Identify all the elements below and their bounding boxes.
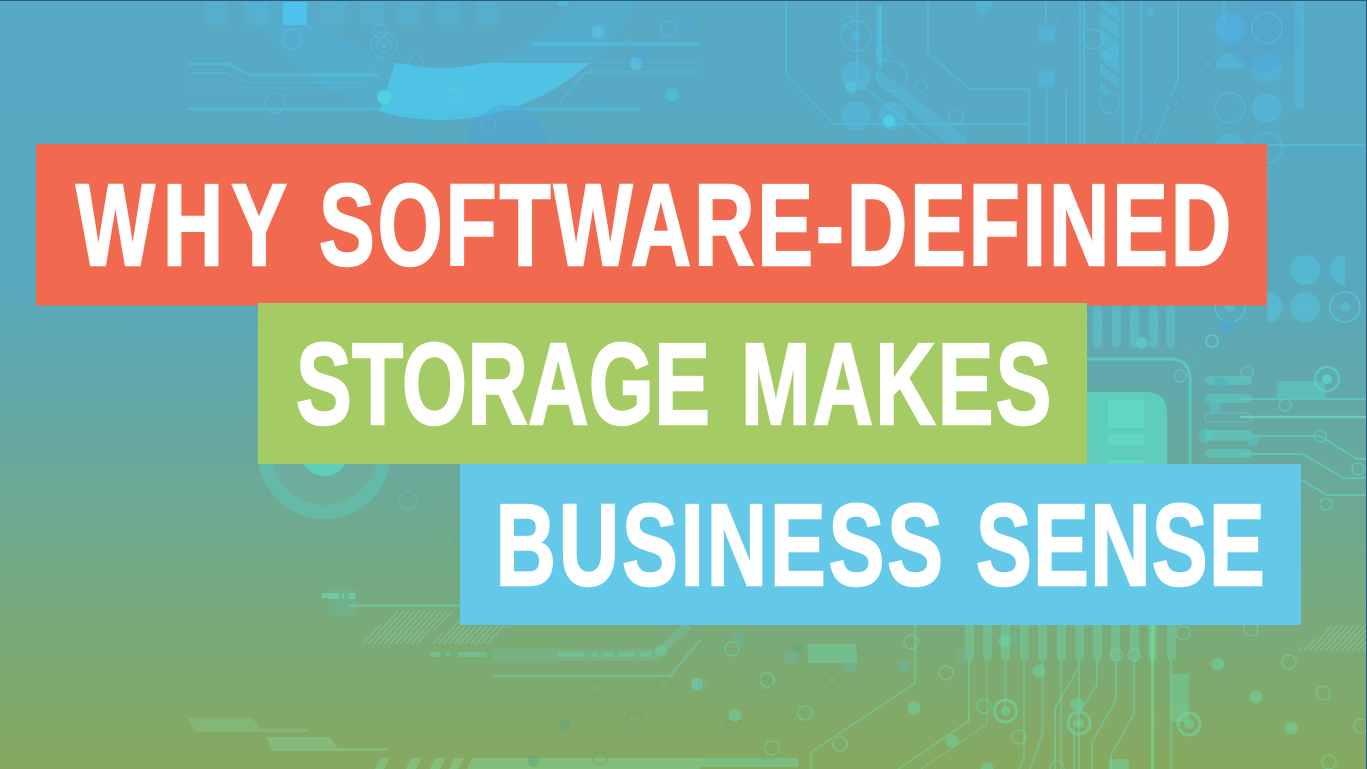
banner: why software-defined [36, 144, 1267, 306]
top arc and squares circuit art [188, 1, 700, 144]
bottom left circuit art [188, 589, 703, 769]
banner: why software-defined: WHY [76, 162, 287, 290]
banner: storage makes: STORAGE [296, 321, 710, 449]
right connector pads and traces [1199, 366, 1367, 510]
banner: business sense: BUSINESS [496, 482, 943, 610]
central chip with traces [1087, 305, 1190, 464]
banner: business sense: SENSE [976, 482, 1265, 610]
banner: why software-defined: SOFTWARE-DEFINED [319, 162, 1231, 290]
right dots grid [1181, 255, 1360, 366]
title [36, 144, 1301, 625]
left target circle [258, 385, 470, 551]
banner: storage makes [258, 303, 1087, 464]
banner: storage makes: MAKES [741, 321, 1051, 449]
banner: business sense [460, 464, 1301, 625]
bottom centre circuit art [693, 620, 1367, 769]
top right circuit art [786, 0, 1367, 163]
